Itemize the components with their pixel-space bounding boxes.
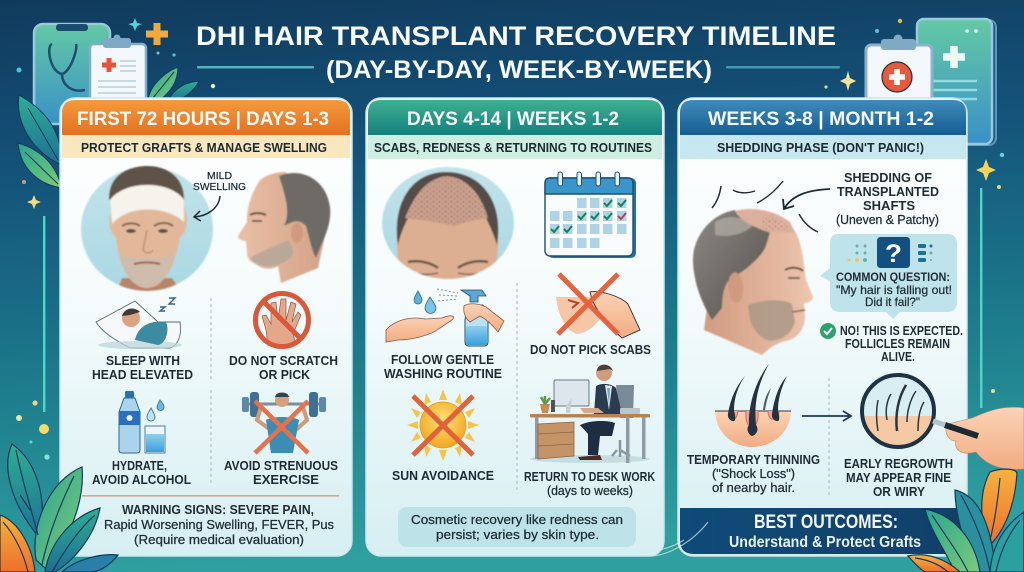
warning signs text: (Require medical evaluation) xyxy=(134,533,304,547)
panel header xyxy=(680,100,966,135)
item: do not scratch: OR PICK xyxy=(259,368,310,382)
item: return to desk work: RETURN TO DESK WORK xyxy=(524,470,655,484)
note box: persist; varies by skin type. xyxy=(436,528,599,542)
bottom-center light streak xyxy=(640,522,708,556)
banner: best outcomes xyxy=(680,508,966,554)
item: temporary thinning: of nearby hair. xyxy=(712,481,795,495)
title line 2: (DAY-BY-DAY, WEEK-BY-WEEK) xyxy=(326,56,712,84)
item: early regrowth: MAY APPEAR FINE xyxy=(846,471,951,485)
item: gentle washing xyxy=(384,289,504,381)
icon: man working at desk xyxy=(530,365,650,463)
panel 3: weeks 3-8 xyxy=(678,98,967,556)
note box: Cosmetic recovery like redness can xyxy=(411,513,623,527)
banner: best outcomes: Understand & Protect Grafts xyxy=(729,534,921,551)
item: early regrowth: EARLY REGROWTH xyxy=(844,457,953,471)
item: sun avoidance: SUN AVOIDANCE xyxy=(392,469,494,483)
panel subheading xyxy=(368,135,662,159)
photo: top of scalp with grafts xyxy=(382,167,514,290)
icon: person sleeping xyxy=(96,298,182,349)
item: early regrowth: OR WIRY xyxy=(873,485,926,499)
icon: crossed-out weightlifter xyxy=(242,392,326,453)
hand holding magnifier xyxy=(933,407,1024,469)
item: hydrate: HYDRATE, xyxy=(112,459,167,473)
item: gentle washing: FOLLOW GENTLE xyxy=(391,353,494,367)
divider xyxy=(82,495,339,497)
warning signs text: WARNING SIGNS: SEVERE PAIN, xyxy=(122,503,314,517)
label: shedding of transplanted shafts: SHEDDING OF xyxy=(844,171,932,185)
item: temporary thinning: TEMPORARY THINNING xyxy=(687,453,820,467)
item: sleep with head elevated: SLEEP WITH xyxy=(106,354,180,368)
item: do not scratch: DO NOT SCRATCH xyxy=(229,354,338,368)
shed hair strands xyxy=(712,181,818,232)
icon: calendar with checks xyxy=(545,172,636,258)
panel subheading: PROTECT GRAFTS & MANAGE SWELLING xyxy=(81,141,327,155)
panel card xyxy=(678,98,967,556)
divider xyxy=(516,283,518,493)
panel header: WEEKS 3-8 | MONTH 1-2 xyxy=(708,109,934,130)
arrow: thinning to regrowth xyxy=(802,411,851,421)
label: mild swelling: MILD xyxy=(207,170,232,182)
photo: front view with bandage xyxy=(81,166,213,291)
icon: crossed-out sun xyxy=(407,389,479,461)
banner: best outcomes: BEST OUTCOMES: xyxy=(754,512,898,533)
item: do not scratch xyxy=(229,294,338,382)
panel subheading: SCABS, REDNESS & RETURNING TO ROUTINES xyxy=(374,141,652,155)
decorative sparkles left xyxy=(16,18,215,460)
icon: water bottle and glass xyxy=(119,391,165,453)
leaves behind first panel xyxy=(18,67,199,188)
panel header xyxy=(62,100,350,135)
icon: tablet with plus xyxy=(917,19,996,145)
title accent lines xyxy=(197,66,840,68)
panel card xyxy=(60,98,352,556)
answer text with check: NO! THIS IS EXPECTED. xyxy=(840,324,963,338)
icon: crossed-out hand xyxy=(256,294,308,346)
label: shedding of transplanted shafts: SHAFTS xyxy=(863,199,915,213)
label: shedding of transplanted shafts: TRANSPLANTED xyxy=(837,185,939,199)
item: return to desk work xyxy=(524,365,655,498)
bottom-right leaves xyxy=(908,469,1024,572)
item: sun avoidance xyxy=(392,389,494,483)
item: avoid exercise: AVOID STRENUOUS xyxy=(224,459,338,473)
bottom-left leaves xyxy=(0,444,118,572)
icon: orange plus xyxy=(146,23,168,45)
panel subheading xyxy=(680,135,966,159)
icon: clipboard with red cross xyxy=(866,34,932,105)
divider xyxy=(210,298,212,483)
title line 1: DHI HAIR TRANSPLANT RECOVERY TIMELINE xyxy=(196,21,836,51)
item: avoid exercise xyxy=(224,392,338,487)
label: mild swelling: SWELLING xyxy=(193,181,246,193)
icon: magnifying glass over skin xyxy=(860,375,936,448)
panel 1: first 72 hours xyxy=(60,98,352,556)
icon: hand, water drops and spray bottle xyxy=(386,289,504,346)
item: hydrate: AVOID ALCOHOL xyxy=(92,473,191,487)
panel subheading xyxy=(62,135,350,158)
item: do not pick scabs xyxy=(530,274,651,357)
icon: question mark box: ? xyxy=(885,240,902,268)
callout: common question: COMMON QUESTION: xyxy=(836,270,950,284)
arrow: to shafts xyxy=(783,189,830,209)
icon: green check xyxy=(820,323,836,339)
item: temporary thinning: ("Shock Loss") xyxy=(712,467,795,481)
item: gentle washing: WASHING ROUTINE xyxy=(384,367,502,381)
warning signs text: Rapid Worsening Swelling, FEVER, Pus xyxy=(104,518,334,532)
label: shedding of transplanted shafts xyxy=(836,171,939,227)
item: early regrowth xyxy=(844,375,953,499)
item: sleep with head elevated: HEAD ELEVATED xyxy=(92,368,193,382)
warning signs text xyxy=(104,503,334,547)
photo: side profile xyxy=(238,172,330,283)
label: shedding of transplanted shafts: (Uneven & Patchy) xyxy=(836,213,939,227)
item: do not pick scabs: DO NOT PICK SCABS xyxy=(530,343,651,357)
decorative sparkles right xyxy=(824,19,1004,408)
label: mild swelling xyxy=(193,170,246,221)
title xyxy=(196,21,836,84)
answer text with check xyxy=(820,323,963,364)
panel 2: days 4-14 xyxy=(366,98,664,556)
divider xyxy=(828,378,830,495)
item: hydrate xyxy=(92,391,191,487)
item: avoid exercise: EXERCISE xyxy=(253,473,319,487)
panel header: DAYS 4-14 | WEEKS 1-2 xyxy=(407,109,619,130)
callout: common question xyxy=(820,234,957,319)
item: sleep with head elevated xyxy=(92,298,193,382)
icon: clipboard with red cross xyxy=(90,34,146,104)
callout: common question: Did it fail?" xyxy=(865,295,920,309)
photo: side profile, thinning hair xyxy=(693,209,813,355)
note box xyxy=(398,507,636,547)
panel header: FIRST 72 HOURS | DAYS 1-3 xyxy=(77,109,329,130)
panel header xyxy=(368,100,662,135)
item: return to desk work: (days to weeks) xyxy=(547,484,633,498)
answer text with check: ALIVE. xyxy=(881,350,915,364)
panel card xyxy=(366,98,664,556)
icon: hand picking with red X xyxy=(556,274,640,338)
callout: common question: "My hair is falling out! xyxy=(836,283,952,297)
icon: phone with stethoscope xyxy=(34,24,110,124)
item: temporary thinning xyxy=(687,364,820,495)
icon group: top-left medical phone and clipboard xyxy=(34,23,168,124)
answer text with check: FOLLICLES REMAIN xyxy=(845,337,950,351)
icon group: top-right phone and clipboard xyxy=(866,19,996,145)
icon: follicle cross-section xyxy=(715,364,791,447)
panel subheading: SHEDDING PHASE (DON'T PANIC!) xyxy=(717,141,924,155)
